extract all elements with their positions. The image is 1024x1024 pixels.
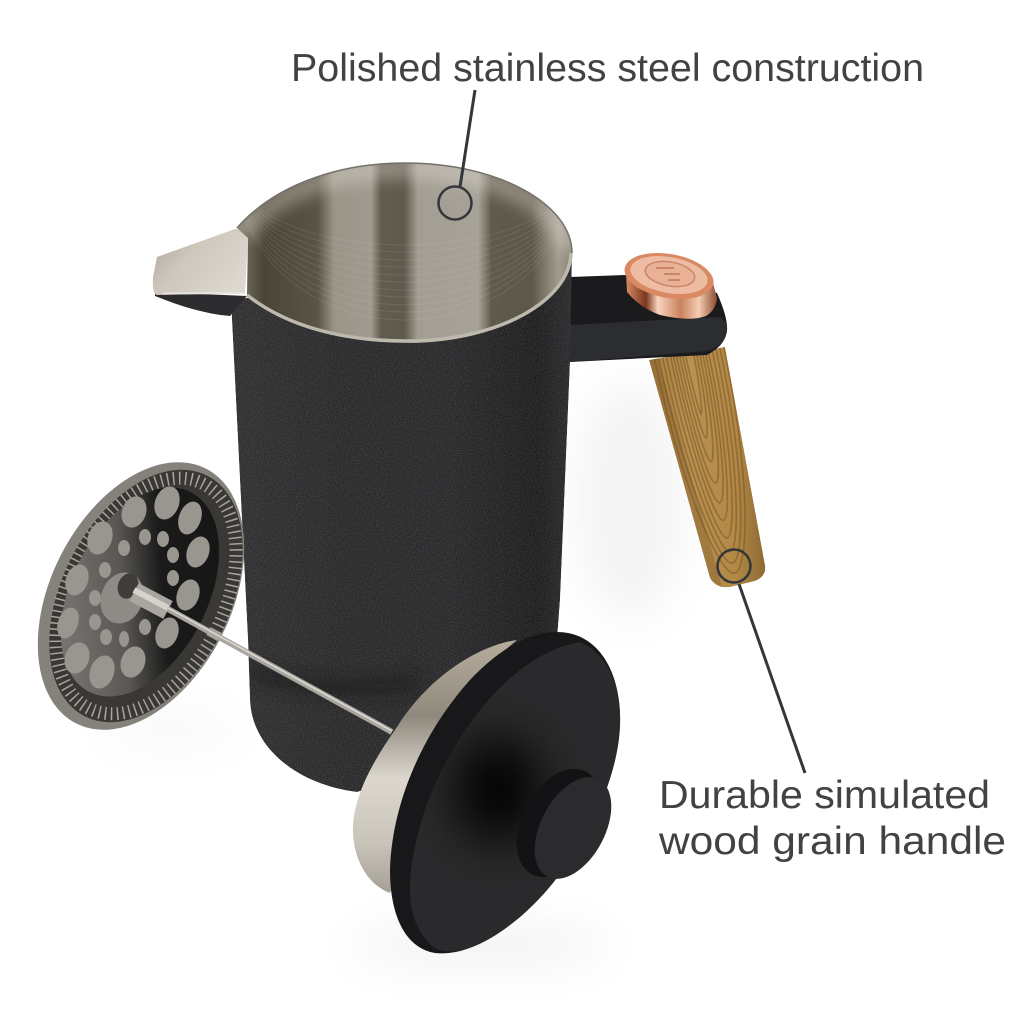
black lid disc: [390, 632, 620, 953]
lid knob stem: [522, 788, 555, 832]
text: handle label: wood grain handle: [658, 820, 1006, 863]
callout: wood grain handle: [658, 550, 1006, 863]
lid flat face: [410, 642, 620, 952]
steel lid insert: [353, 640, 517, 893]
icon: carafe body: [231, 255, 572, 792]
lid knob: [499, 754, 619, 892]
leader line: handle: [739, 584, 805, 773]
icon: pouring spout: [153, 229, 248, 316]
callout: polished stainless steel: [291, 47, 924, 220]
icon: carafe rim and interior: [236, 162, 573, 343]
marker: steel: [438, 186, 472, 220]
icon: plunger rod: [134, 590, 392, 732]
icon: lid: [353, 632, 627, 953]
icon: plunger filter disc: [0, 428, 286, 764]
icon: black handle bracket: [570, 275, 727, 362]
icon: wooden handle: [649, 345, 770, 587]
text: handle label: Durable simulated: [659, 774, 990, 817]
icon: copper cap: [621, 247, 717, 319]
marker: handle: [718, 550, 750, 582]
leader line: steel: [460, 90, 475, 187]
soft shadows: [100, 380, 685, 967]
heading: steel label: Polished stainless steel construction: [291, 47, 924, 90]
